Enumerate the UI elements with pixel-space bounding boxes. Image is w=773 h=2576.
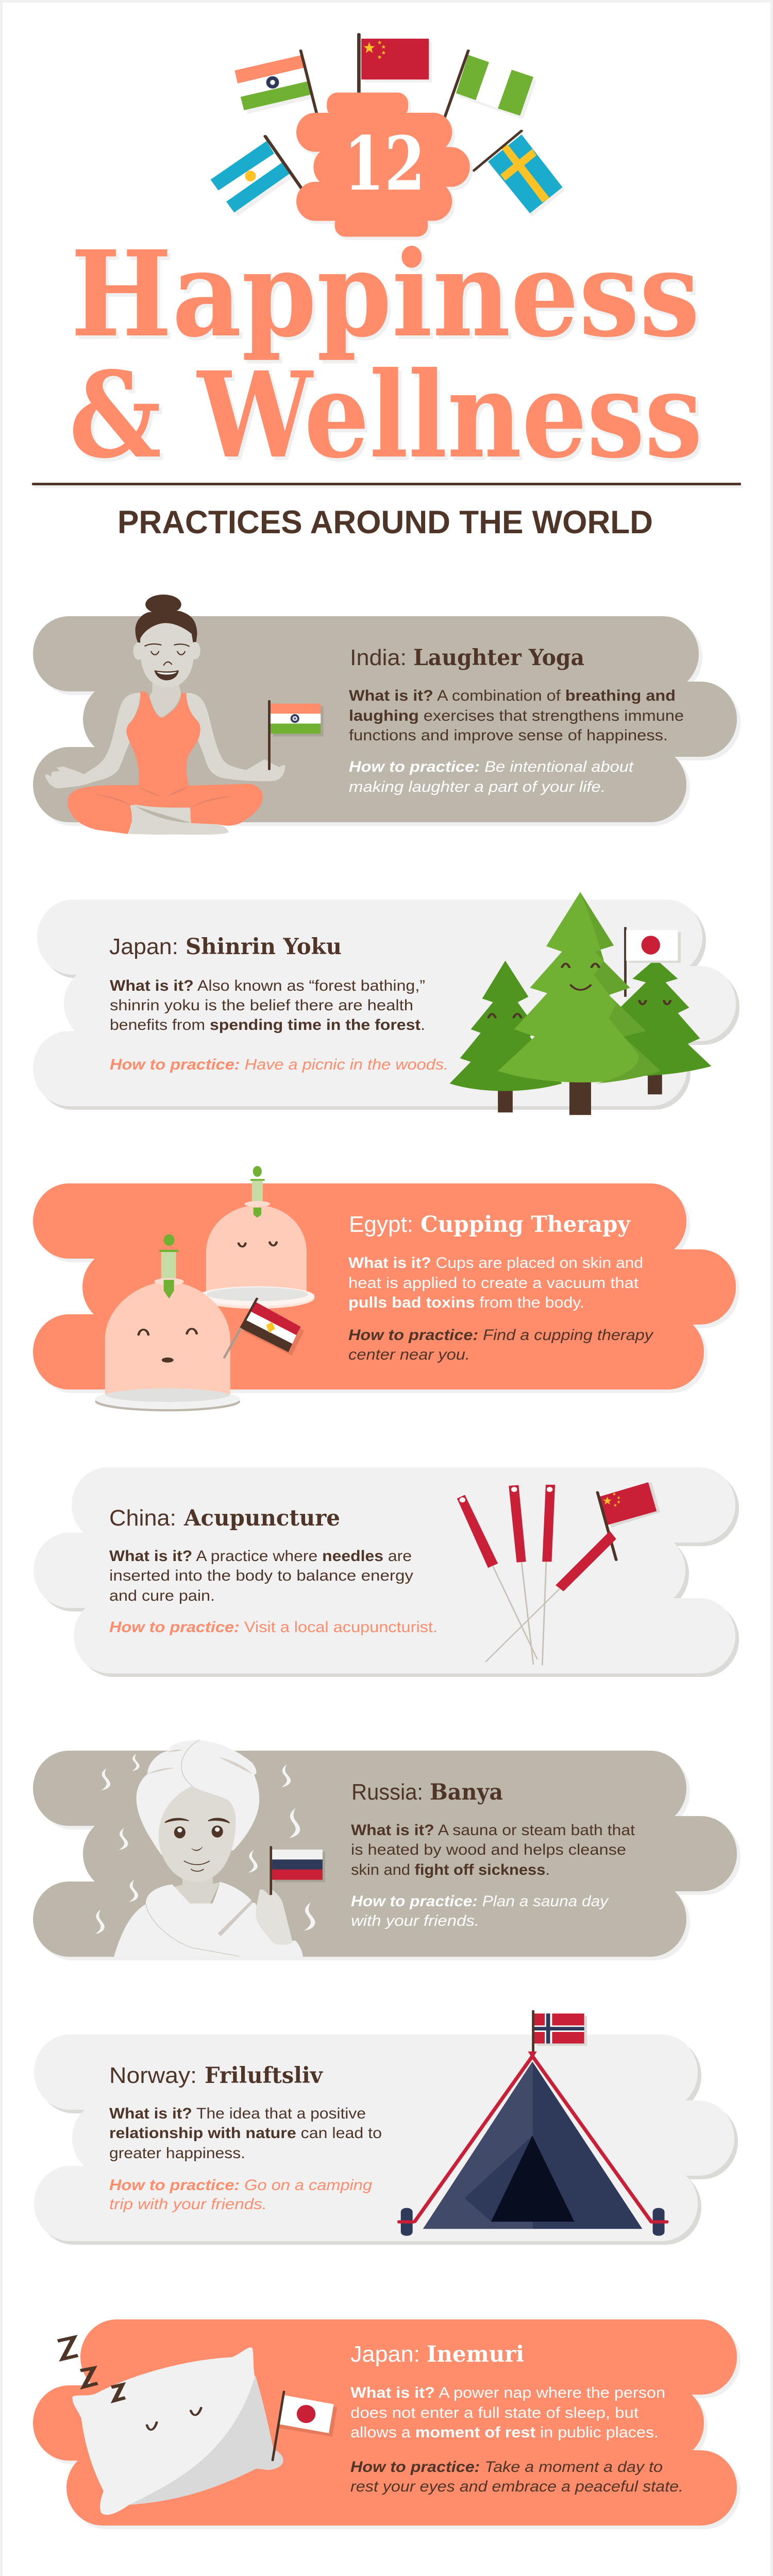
illustration: woman in towel and robe with Russia flag	[95, 1740, 325, 1957]
text block: what is it: relationship with nature can lead to	[109, 2125, 382, 2142]
heading	[350, 2342, 524, 2367]
heading: Friluftsliv	[205, 2063, 324, 2089]
text block: what is it: is heated by wood and helps cleanse	[351, 1841, 626, 1858]
panel: Russia Banya	[33, 1740, 741, 1960]
illustration: sleeping pillow with Japan flag	[58, 2337, 337, 2515]
heading: Japan:	[109, 934, 178, 959]
text block: what is it: What is it? Also known as “forest bathing,”	[110, 977, 425, 994]
text block: what is it: What is it? A power nap where the person	[350, 2384, 665, 2401]
text block: how to practice: trip with your friends.	[109, 2196, 267, 2213]
text block: how to practice: How to practice: Visit a local acupuncturist.	[109, 1619, 438, 1636]
heading: Laughter Yoga	[413, 645, 584, 671]
heading	[109, 2063, 324, 2089]
panel background	[33, 616, 741, 826]
text block: what is it: functions and improve sense of happiness.	[349, 727, 668, 744]
heading: Egypt:	[349, 1212, 413, 1237]
text block: how to practice: How to practice: Be intentional about	[349, 758, 634, 775]
illustration: acupuncture needles with China flag	[457, 1482, 660, 1666]
flag: India	[234, 50, 316, 114]
header flags and number badge	[210, 35, 564, 240]
text block: what is it: skin and fight off sickness.	[351, 1861, 550, 1878]
flag: Argentina	[210, 136, 301, 216]
text block: how to practice: How to practice: Find a cupping therapy	[348, 1327, 654, 1344]
heading: Norway:	[109, 2063, 197, 2088]
text block: what is it: What is it? The idea that a positive	[109, 2105, 366, 2122]
text block: what is it: laughing exercises that strengthens immune	[349, 707, 684, 724]
badge number: 12	[344, 120, 425, 207]
illustration: tent with Norway flag	[397, 2010, 668, 2236]
text block: how to practice: How to practice: Take a moment a day to	[350, 2459, 663, 2476]
text block: what is it: shinrin yoku is the belief there are health	[110, 997, 413, 1014]
panel background	[34, 2035, 738, 2245]
text block: what is it: What is it? Cups are placed on skin and	[348, 1255, 643, 1272]
text block: how to practice: rest your eyes and embrace a peaceful state.	[350, 2478, 683, 2495]
panel: Egypt Cupping Therapy	[33, 1166, 740, 1411]
text block: how to practice: How to practice: Go on a camping	[109, 2177, 372, 2194]
text block: how to practice	[350, 2459, 683, 2495]
text block: what is it: greater happiness.	[109, 2145, 245, 2162]
panel background	[33, 2319, 741, 2529]
text block: what is it: benefits from spending time in the forest .	[110, 1016, 425, 1033]
heading	[109, 934, 342, 960]
text block: what is it: What is it? A sauna or steam bath that	[351, 1822, 635, 1839]
text block: what is it	[349, 687, 684, 744]
text block: how to practice: How to practice: Have a picnic in the woods.	[110, 1056, 448, 1073]
panel background	[33, 900, 740, 1110]
text block: what is it: inserted into the body to balance energy	[109, 1567, 413, 1584]
text block: what is it	[110, 977, 425, 1033]
illustration: cupping cups with Egypt flag	[95, 1166, 314, 1411]
heading: Shinrin Yoku	[186, 934, 342, 960]
text block: what is it	[109, 2105, 382, 2162]
text block: how to practice: center near you.	[348, 1346, 470, 1363]
text block: what is it: What is it? A combination of breathing and	[349, 687, 676, 704]
text block: how to practice	[349, 758, 634, 795]
badge: number 12 blob	[296, 93, 473, 240]
text block: what is it: heat is applied to create a vacuum that	[348, 1275, 639, 1292]
panel background	[33, 1751, 741, 1960]
heading: Banya	[430, 1780, 503, 1805]
heading: Russia:	[351, 1780, 423, 1805]
heading	[351, 1780, 503, 1805]
text block: how to practice	[109, 2177, 372, 2213]
heading: Cupping Therapy	[421, 1212, 631, 1238]
illustration: meditating woman with India flag	[45, 595, 324, 835]
heading: Inemuri	[427, 2342, 524, 2367]
heading: Acupuncture	[183, 1505, 340, 1531]
heading	[109, 1505, 340, 1531]
panel: Norway Friluftsliv	[34, 2010, 738, 2245]
text block: what is it: allows a moment of rest in public places.	[350, 2424, 659, 2441]
panel: India Laughter Yoga	[33, 595, 741, 835]
flag: Nigeria	[445, 50, 536, 119]
panel background	[33, 1183, 740, 1393]
text block: how to practice: making laughter a part of your life.	[349, 778, 606, 795]
heading: China:	[109, 1505, 176, 1531]
text block: how to practice	[348, 1327, 654, 1363]
heading: India:	[350, 645, 407, 670]
text block: how to practice	[351, 1893, 609, 1929]
subtitle: PRACTICES AROUND THE WORLD	[117, 504, 653, 540]
flag: Sweden	[474, 131, 564, 217]
text block: what is it: does not enter a full state of sleep, but	[350, 2404, 639, 2421]
panel: Japan Inemuri	[33, 2319, 741, 2529]
text block: what is it: and cure pain.	[109, 1587, 215, 1604]
title: Happiness	[71, 225, 700, 364]
text block: how to practice: with your friends.	[351, 1912, 479, 1929]
text block: what is it: What is it? A practice where needles are	[109, 1548, 412, 1565]
heading: Japan:	[350, 2342, 420, 2367]
flag: China	[359, 35, 432, 93]
panel background	[33, 1467, 739, 1677]
text block: how to practice: How to practice: Plan a sauna day	[351, 1893, 609, 1910]
text block: what is it	[109, 1548, 413, 1604]
text block: what is it	[351, 1822, 635, 1878]
panel: Japan Shinrin Yoku	[33, 892, 740, 1115]
panel: China Acupuncture	[33, 1467, 739, 1677]
title	[69, 225, 702, 485]
text block: what is it	[350, 2384, 665, 2441]
text block: what is it	[348, 1255, 643, 1311]
illustration: smiling pine trees with Japan flag	[449, 892, 711, 1115]
text block: what is it: pulls bad toxins from the body.	[348, 1294, 584, 1311]
